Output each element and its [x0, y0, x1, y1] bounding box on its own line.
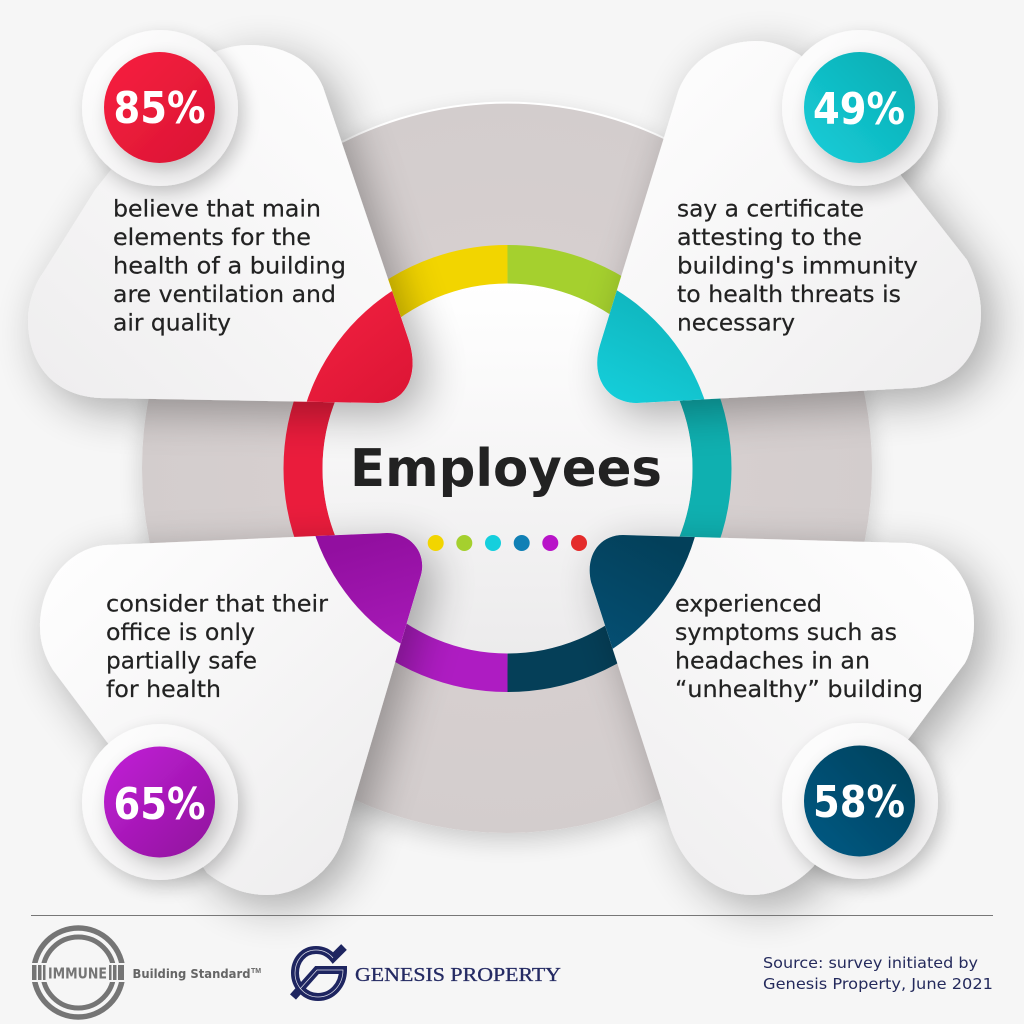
source note: Genesis Property, June 2021: [763, 975, 993, 993]
ring segment: red: [303, 324, 363, 613]
panel: top right: [597, 41, 981, 403]
text: 58% description: “unhealthy” building: [675, 677, 923, 703]
panel shape: [40, 533, 422, 895]
logo: Genesis Property: [293, 947, 561, 997]
panel shape: [597, 41, 981, 403]
text: 85% description: are ventilation and: [113, 282, 336, 308]
text: 49% description: necessary: [677, 310, 795, 336]
panel: bottom left: [40, 533, 422, 895]
icon: G mark: [293, 947, 344, 997]
grey background disc: [142, 103, 872, 833]
text: 58% description: symptoms such as: [675, 620, 897, 646]
title: Employees: [350, 439, 662, 499]
panel: bottom right: [590, 535, 974, 895]
text: 85% description: air quality: [113, 310, 231, 336]
text: 58% description: [675, 592, 923, 703]
badge: 85%: 85%: [114, 83, 206, 134]
navy sector: [590, 535, 695, 649]
text: 49% description: to health threats is: [677, 282, 901, 308]
badge: 85%: [82, 30, 238, 186]
colour dots: [428, 535, 587, 551]
ring segment: purple: [363, 613, 508, 673]
badge: 65%: [82, 724, 238, 880]
text: 85% description: [113, 196, 346, 336]
panel shape: [28, 45, 413, 403]
logo: IMMUNE Building Standard: TM: [251, 968, 261, 975]
ring segment: yellow: [363, 264, 508, 324]
text: 58% description: headaches in an: [675, 648, 870, 674]
text: 65% description: [106, 592, 329, 703]
text: 49% description: attesting to the: [677, 225, 862, 251]
source note: Source: survey initiated by: [763, 954, 978, 972]
text: 49% description: say a certificate: [677, 196, 864, 222]
wordmark: GENESIS PROPERTY: [355, 965, 561, 986]
red sector: [306, 291, 413, 403]
centre circle: [322, 284, 692, 654]
footer divider: [31, 915, 993, 916]
purple sector: [316, 533, 422, 644]
ring segment: teal: [652, 324, 712, 613]
text: 65% description: consider that their: [106, 592, 329, 618]
cyan sector: [597, 290, 704, 403]
text: 65% description: office is only: [106, 620, 255, 646]
ring segment: navy: [508, 613, 652, 673]
colour ring: [303, 264, 712, 673]
source note: [763, 954, 993, 993]
badge: 58%: [782, 723, 938, 879]
text: 85% description: elements for the: [113, 225, 311, 251]
logo: IMMUNE Building Standard: [29, 928, 261, 1017]
text: 49% description: [677, 196, 918, 336]
text: 65% description: for health: [106, 677, 221, 703]
text: 85% description: believe that main: [113, 196, 321, 222]
badge: 49%: 49%: [813, 84, 905, 135]
ring segment: green: [508, 264, 652, 324]
text: 49% description: building's immunity: [677, 254, 918, 280]
badge: 49%: [782, 30, 938, 186]
panel shape: [590, 535, 974, 895]
logo: IMMUNE Building Standard: Building Standard: [132, 966, 250, 981]
panel: top left: [28, 45, 413, 403]
logo: IMMUNE Building Standard: IMMUNE: [48, 964, 107, 982]
text: 85% description: health of a building: [113, 254, 346, 280]
badge: 58%: 58%: [813, 777, 905, 828]
text: 65% description: partially safe: [106, 648, 257, 674]
badge: 65%: 65%: [114, 779, 206, 830]
text: 58% description: experienced: [675, 592, 822, 618]
